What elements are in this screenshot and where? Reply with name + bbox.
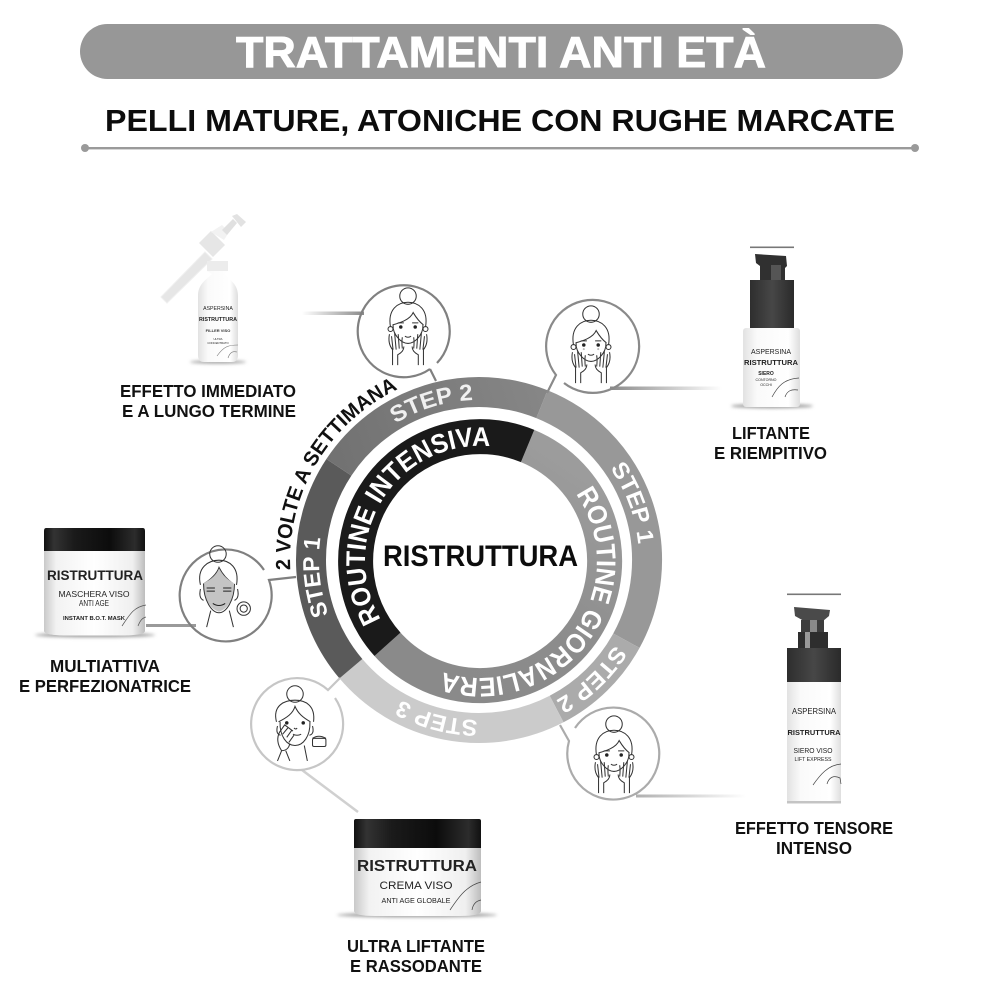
top line [787, 594, 841, 595]
connector line [302, 312, 364, 315]
ring label: routine intensiva: ROUTINE INTENSIVA [346, 427, 490, 626]
product label: filler [120, 381, 296, 421]
title pill [80, 24, 903, 79]
callout: top left face massage [302, 285, 450, 381]
callout: left mask application [146, 546, 296, 641]
product label: lift express: EFFETTO TENSORE [735, 818, 893, 838]
bottle swoosh [217, 345, 238, 358]
product label: mask: MULTIATTIVA [50, 656, 160, 676]
bottle label text: FILLER VISO [206, 328, 230, 333]
icon: woman massaging cheeks [388, 288, 428, 365]
callout: top right eye contour [546, 300, 722, 393]
product: serum eye contour pump [731, 246, 813, 408]
dark collar [787, 648, 841, 682]
bottle label text: RISTRUTTURA [199, 317, 237, 323]
jar label text [47, 568, 143, 622]
outer ring segment: step 1 intensive [311, 467, 351, 669]
jar lid [354, 819, 481, 848]
icon: woman with face mask [200, 546, 250, 627]
jar shadow [35, 633, 155, 637]
ring label: step 1 right: STEP 1 [612, 462, 654, 544]
bottle swoosh [772, 378, 799, 397]
ring label: step 2 top: STEP 2 [390, 384, 472, 422]
bubble with tail [546, 300, 639, 393]
divider line with end dots [81, 144, 919, 152]
icon: woman eye contour [571, 306, 611, 383]
product label: serum eye contour: LIFTANTE [732, 423, 810, 443]
bottle label text: CONCENTRATO [207, 341, 229, 345]
inner ring segment: routine intensiva [356, 437, 528, 644]
connector line [610, 386, 722, 390]
jar label text: CREMA VISO [380, 880, 453, 892]
label text: LIFT EXPRESS [794, 757, 832, 763]
jar shadow [337, 913, 497, 917]
outer ring segment: step 1 daily [542, 404, 647, 641]
icon: woman applying cream [276, 686, 326, 761]
top line [750, 246, 794, 248]
product: filler bottle [161, 214, 246, 364]
product label: filler: EFFETTO IMMEDIATO [120, 381, 296, 401]
ring label: 2 volte a settimana: 2 VOLTE A SETTIMANA [276, 379, 398, 570]
label text [744, 349, 798, 387]
label text: SIERO VISO [794, 748, 833, 755]
label text: ASPERSINA [792, 707, 837, 716]
product: lift express serum pump [787, 594, 841, 804]
inner ring segment: routine giornaliera [388, 446, 605, 686]
bottle label text: ASPERSINA [203, 306, 233, 312]
bubble with tail [180, 549, 296, 641]
bubble with tail [251, 678, 343, 770]
ring diagram [276, 377, 662, 743]
label text: ASPERSINA [751, 349, 791, 356]
ring label: routine giornaliera: ROUTINE GIORNALIERA [444, 486, 616, 697]
bottle swoosh [813, 764, 841, 785]
connector line [636, 794, 746, 798]
bottle shadow [190, 360, 246, 364]
bottle label text [199, 306, 237, 345]
jar lid [44, 528, 145, 551]
bottle label text: ULTRA [214, 337, 223, 341]
bubble with tail [358, 285, 450, 381]
jar swoosh [122, 605, 146, 626]
outer ring segment: step 3 daily [351, 669, 557, 728]
jar label text: ANTI AGE [79, 598, 109, 608]
jar label text: RISTRUTTURA [357, 858, 477, 875]
icon: woman massaging cheeks [594, 716, 634, 793]
callout: bottom left cream application [251, 678, 358, 812]
bottle body [743, 328, 800, 407]
product label: cream: E RASSODANTE [350, 956, 482, 976]
bottle shadow [731, 404, 813, 408]
product label: lift express: INTENSO [776, 838, 852, 858]
jar label text: ANTI AGE GLOBALE [382, 898, 451, 905]
product label: mask [19, 656, 191, 696]
dropper [161, 214, 246, 303]
product label: cream [347, 936, 485, 976]
bubble with tail [560, 708, 659, 800]
ring label: step 2 lower: STEP 2 [556, 647, 626, 712]
title text: TRATTAMENTI ANTI ETÀ [236, 27, 766, 77]
jar label text: RISTRUTTURA [47, 568, 143, 583]
dark collar [750, 280, 794, 328]
label text: CONTORNO [756, 378, 777, 382]
label text: RISTRUTTURA [788, 728, 841, 737]
product label: filler: E A LUNGO TERMINE [122, 401, 296, 421]
product: cream jar [337, 819, 497, 917]
label text: SIERO [758, 371, 774, 377]
product label: serum eye contour: E RIEMPITIVO [714, 443, 827, 463]
jar body [354, 848, 481, 916]
jar label text [357, 858, 477, 905]
label text [788, 707, 841, 763]
label text: RISTRUTTURA [744, 358, 798, 367]
jar label text: MASCHERA VISO [58, 589, 130, 599]
product: mask jar [35, 528, 155, 637]
outer ring segment: step 2 daily [557, 641, 626, 709]
bottle body [787, 682, 841, 803]
jar swoosh [450, 882, 481, 910]
subtitle: PELLI MATURE, ATONICHE CON RUGHE MARCATE [105, 103, 895, 138]
outer ring segment: step 2 intensive [339, 392, 542, 467]
jar label text: INSTANT B.O.T. MASK [63, 616, 126, 622]
callout: bottom right face massage [560, 708, 746, 800]
label text: OCCHI [760, 383, 772, 387]
ring label: step 1 left: STEP 1 [303, 538, 327, 618]
product label: serum eye contour [714, 423, 827, 463]
connector line [302, 770, 358, 812]
jar body [44, 551, 145, 636]
center label: RISTRUTTURA [383, 540, 578, 573]
product label: cream: ULTRA LIFTANTE [347, 936, 485, 956]
product label: mask: E PERFEZIONATRICE [19, 676, 191, 696]
connector line [146, 624, 196, 627]
pump head [794, 607, 830, 621]
pump head [755, 254, 787, 282]
product label: lift express [735, 818, 893, 858]
bottle neck and body [198, 261, 238, 362]
ring label: step 3: STEP 3 [396, 702, 477, 736]
